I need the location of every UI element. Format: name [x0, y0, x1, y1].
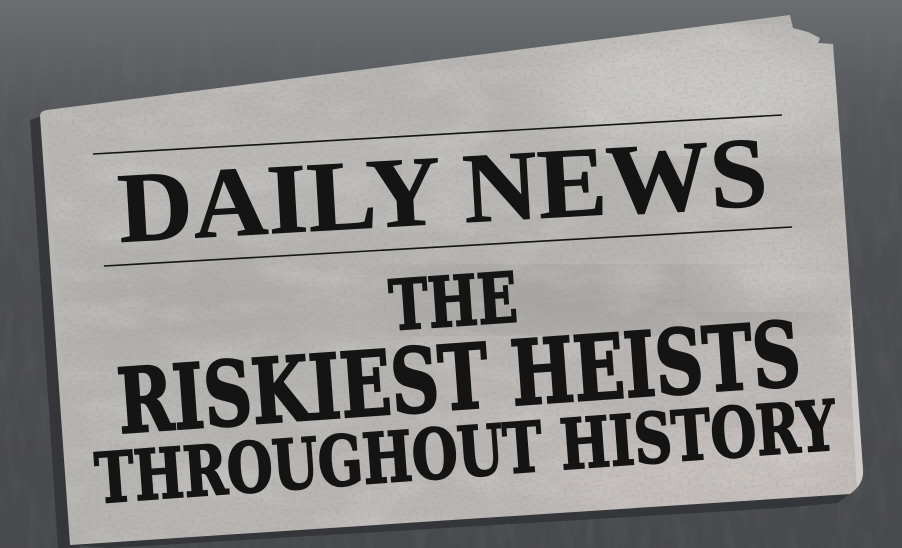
paper shadow	[30, 110, 850, 548]
rule: top	[93, 115, 782, 154]
headline: The: THE	[387, 257, 520, 347]
rule: under masthead	[104, 227, 792, 266]
masthead: Daily News: DAILY NEWS	[115, 116, 770, 264]
